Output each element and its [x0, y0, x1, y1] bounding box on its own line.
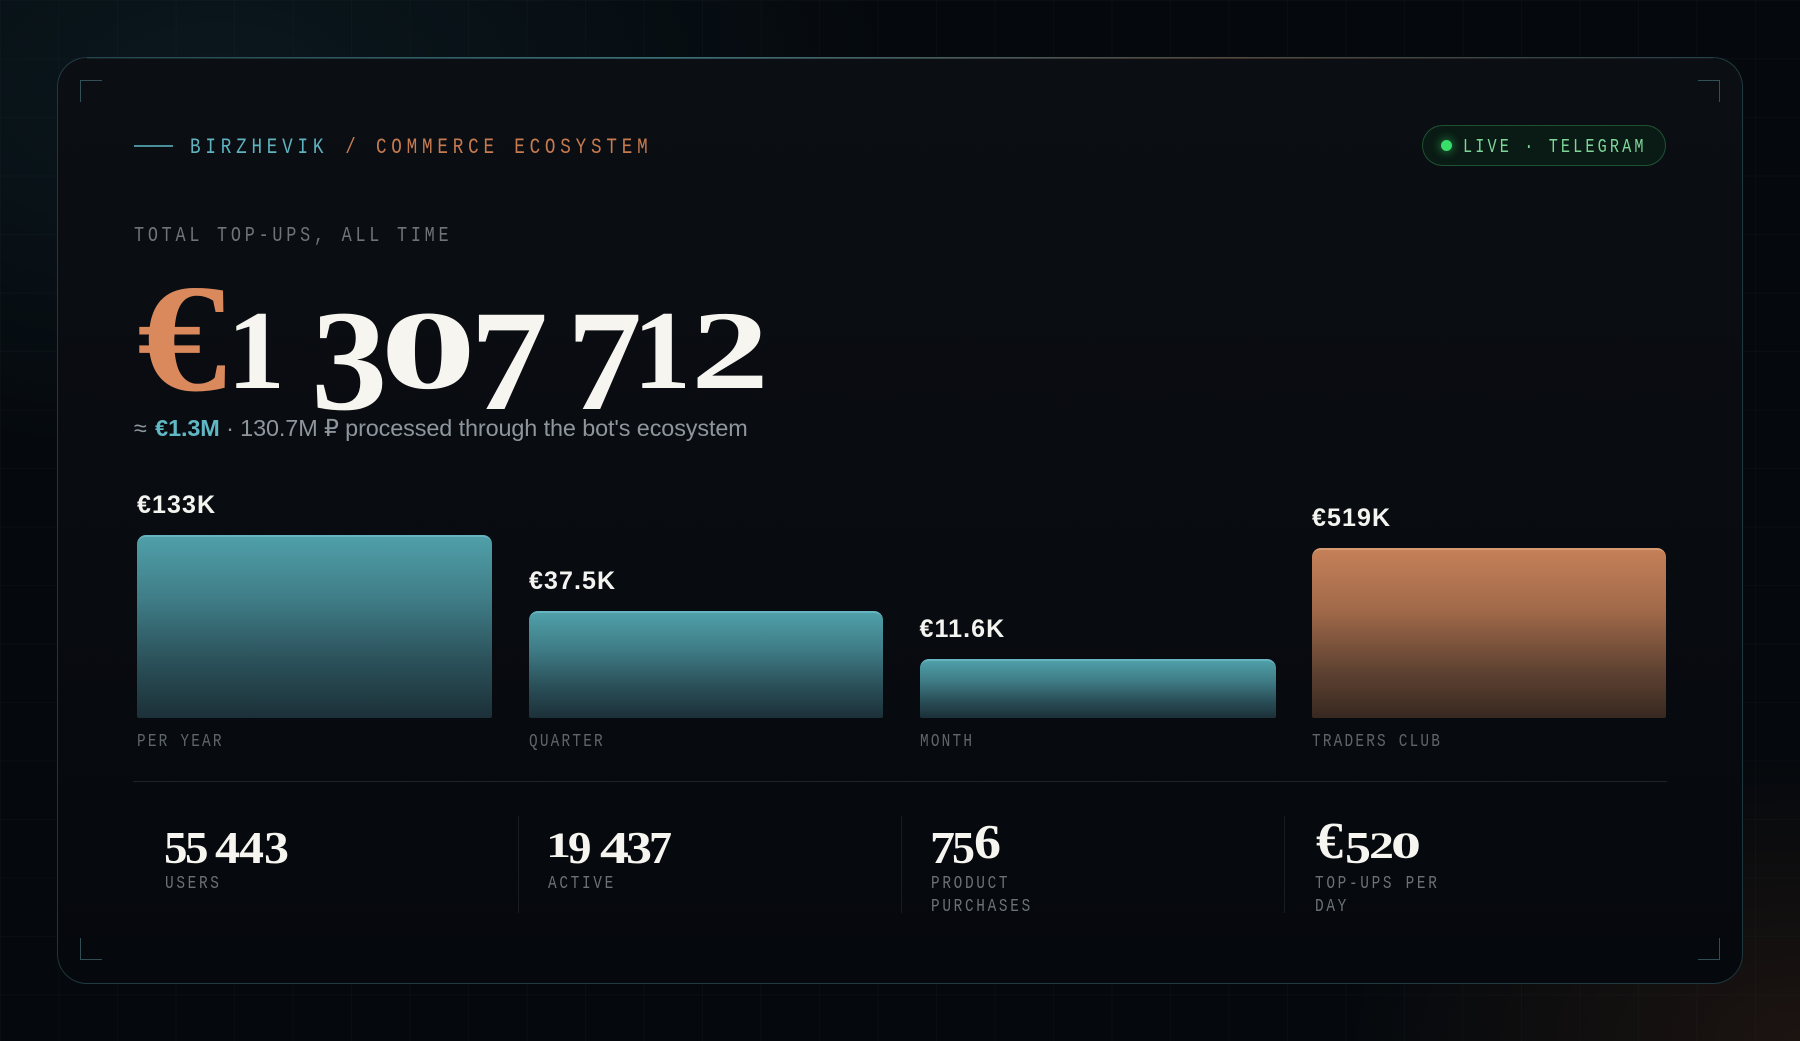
status dot — [1441, 140, 1452, 151]
stat: active — [546, 822, 672, 894]
divider — [133, 781, 1667, 782]
stat: top-ups per day: 0 — [1391, 825, 1421, 866]
bar: traders club — [1312, 504, 1666, 752]
subtitle: ≈ €1.3M · 130.7M ₽ processed through the bot's ecosystem — [134, 415, 748, 441]
bar: month: MONTH — [920, 732, 974, 752]
bar chart — [137, 490, 1666, 752]
stat: users: USERS — [165, 874, 222, 894]
big number total: 0 — [380, 289, 476, 413]
section label: TOTAL TOP-UPS, ALL TIME — [134, 224, 452, 248]
bar: per year: PER YEAR — [137, 732, 224, 752]
big number total: 3 — [311, 282, 387, 441]
corner bracket: bottom right — [1698, 938, 1720, 960]
stat: top-ups per day: 2 — [1369, 825, 1394, 866]
stat: product purchases: 6 — [974, 815, 1001, 869]
bar: quarter: €37.5K — [529, 566, 616, 594]
stat: top-ups per day: DAY — [1315, 897, 1349, 917]
big number total: 1 — [633, 288, 691, 413]
stat: active: 9 — [568, 823, 591, 873]
big number total: 2 — [691, 289, 769, 413]
stat: top-ups per day: € — [1316, 813, 1343, 870]
corner bracket: top left — [80, 80, 102, 102]
stat: active: ACTIVE — [548, 874, 616, 894]
big number total: € — [137, 254, 227, 424]
stat: active: 3 — [626, 823, 652, 873]
stat: users — [164, 823, 289, 894]
big number total: 7 — [470, 281, 548, 441]
corner bracket: top right — [1698, 80, 1720, 102]
stat: users: 5 — [185, 823, 208, 873]
badge text: LIVE · TELEGRAM — [1462, 136, 1646, 158]
bar: traders club: €519K — [1312, 504, 1391, 532]
stat: users: 4 — [239, 824, 264, 873]
stat: top-ups per day: 5 — [1345, 823, 1371, 873]
stat: active: 4 — [600, 824, 629, 873]
eyebrow heading: BIRZHEVIK / COMMERCE ECOSYSTEM — [190, 134, 652, 160]
stat: users: 5 — [164, 823, 187, 873]
bar: month — [920, 614, 1276, 752]
stat: users: 3 — [264, 824, 289, 873]
bar: per year — [137, 490, 492, 752]
bar: quarter — [529, 566, 883, 752]
corner bracket: bottom left — [80, 938, 102, 960]
bar: per year: €133K — [137, 490, 216, 518]
stat: users: 4 — [215, 824, 240, 873]
stat: top-ups per day — [1315, 813, 1440, 917]
stat: active: 7 — [649, 822, 672, 873]
stat: product purchases: 5 — [952, 822, 975, 873]
stat: product purchases: 7 — [930, 824, 955, 873]
big number total: 1 — [227, 288, 285, 413]
big number total: 7 — [567, 281, 642, 440]
bar: traders club: TRADERS CLUB — [1312, 732, 1442, 752]
stat: product purchases: PURCHASES — [931, 897, 1033, 917]
stat: product purchases — [930, 815, 1033, 917]
stat: product purchases: PRODUCT — [931, 874, 1010, 894]
bar: quarter: QUARTER — [529, 732, 605, 752]
stat: active: 1 — [546, 826, 571, 865]
bar: month: €11.6K — [920, 614, 1005, 642]
live badge — [1422, 125, 1666, 166]
eyebrow rule — [134, 145, 173, 146]
stat: top-ups per day: TOP-UPS PER — [1315, 874, 1440, 894]
